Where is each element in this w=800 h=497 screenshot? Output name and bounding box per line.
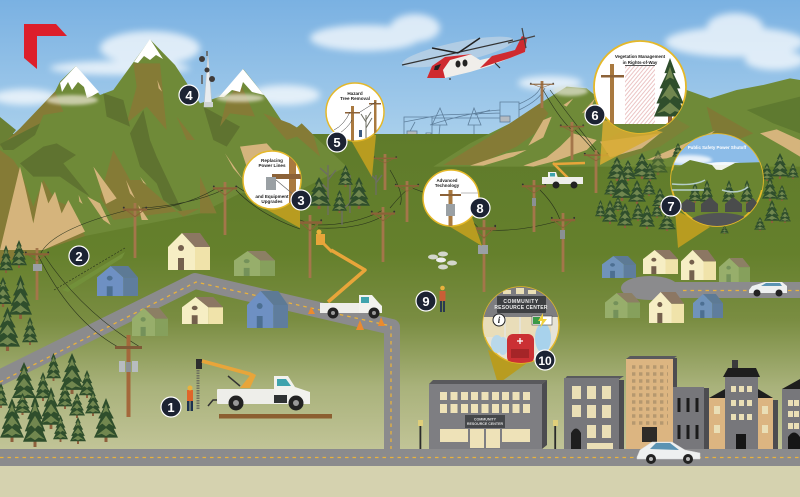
callout: hazard tree removal xyxy=(326,83,384,141)
traffic cones xyxy=(308,307,385,330)
clouds xyxy=(0,13,800,105)
callout: vegetation management: in Rights-of-Way xyxy=(623,60,658,65)
right mountains xyxy=(433,78,800,167)
left hill behind xyxy=(0,117,16,150)
callout: community resource center: COMMUNITY xyxy=(503,299,539,305)
callout: power lines: Replacing xyxy=(261,158,283,163)
callout: public safety power shutoff xyxy=(668,133,765,231)
badge 5: 5 xyxy=(333,135,341,150)
callout: power lines xyxy=(243,151,304,215)
badge 1 xyxy=(161,397,181,417)
callout: community resource center: RESOURCE CENTER xyxy=(494,305,548,311)
badge 8: 8 xyxy=(476,201,484,216)
left mountains xyxy=(0,39,347,263)
substation xyxy=(404,85,545,138)
right-of-way strip xyxy=(62,252,125,292)
badge 3 xyxy=(291,190,311,210)
callout: advanced technology: Technology xyxy=(435,183,460,188)
callout: vegetation management xyxy=(590,41,690,136)
utility pole with transformer xyxy=(115,335,142,417)
grey block xyxy=(673,387,709,449)
callout: advanced technology xyxy=(423,170,479,228)
community resource center building: RESOURCE CENTER xyxy=(467,422,503,426)
dead hazard trees xyxy=(320,165,382,225)
wood pole on ground xyxy=(219,414,332,418)
badge 8 xyxy=(470,198,490,218)
right mountain mist xyxy=(552,86,588,96)
right forest xyxy=(595,143,799,234)
badge 6: 6 xyxy=(591,108,599,123)
badge 4: 4 xyxy=(185,88,193,103)
drone xyxy=(428,252,457,270)
utility poles xyxy=(25,81,608,300)
far right building xyxy=(782,379,800,449)
helicopter xyxy=(400,28,535,80)
number badges xyxy=(69,85,681,417)
tan and grey complex xyxy=(709,360,778,449)
bucket truck in hills xyxy=(542,163,585,188)
power lines xyxy=(38,88,600,347)
callout: hazard tree removal: Hazard xyxy=(347,91,363,96)
callout: power lines: and Equipment xyxy=(255,194,289,199)
callout wedges xyxy=(262,120,710,384)
callout: community resource center xyxy=(480,285,562,363)
brownstone xyxy=(564,376,624,449)
houses xyxy=(97,233,750,336)
ground xyxy=(0,134,800,467)
inspector with drone controller xyxy=(440,286,446,312)
badge 2: 2 xyxy=(75,249,83,264)
left forest xyxy=(0,240,118,447)
badge 7: 7 xyxy=(667,199,675,214)
road network xyxy=(0,276,800,458)
callout: hazard tree removal: Tree Removal xyxy=(340,96,370,101)
worker and auger xyxy=(187,359,202,411)
badge 1: 1 xyxy=(167,400,175,415)
digger truck xyxy=(202,361,310,410)
centre trees xyxy=(307,165,370,213)
callout: power lines: Upgrades xyxy=(261,199,283,204)
tan tower xyxy=(626,356,677,449)
bottom band xyxy=(0,466,800,497)
badge 4 xyxy=(179,85,199,105)
badge 10: 10 xyxy=(538,354,552,368)
badge 7 xyxy=(661,196,681,216)
callout: power lines: Power Lines xyxy=(258,163,286,168)
badge 10 xyxy=(535,350,555,370)
callout: vegetation management: Vegetation Management xyxy=(615,54,666,59)
community resource center building: COMMUNITY xyxy=(474,418,497,422)
badge 9: 9 xyxy=(422,294,430,309)
cell tower xyxy=(199,51,215,107)
callout: public safety power shutoff: Public Safety Power Shutoff xyxy=(688,145,747,150)
bucket truck on road xyxy=(316,230,382,318)
badge 5 xyxy=(327,132,347,152)
city buildings xyxy=(564,356,800,449)
sky xyxy=(0,0,800,140)
car on main road xyxy=(637,442,700,464)
snow caps xyxy=(60,39,264,98)
callout: advanced technology: Advanced xyxy=(437,178,458,183)
callout: community resource center: i xyxy=(498,315,501,325)
peak mist xyxy=(46,94,264,105)
logo xyxy=(24,24,67,69)
badge 3: 3 xyxy=(297,193,305,208)
badge 9 xyxy=(416,291,436,311)
street lamps xyxy=(418,420,558,449)
badge 6 xyxy=(585,105,605,125)
community resource center building xyxy=(429,380,547,449)
badge 2 xyxy=(69,246,89,266)
car on upper road xyxy=(749,282,787,296)
